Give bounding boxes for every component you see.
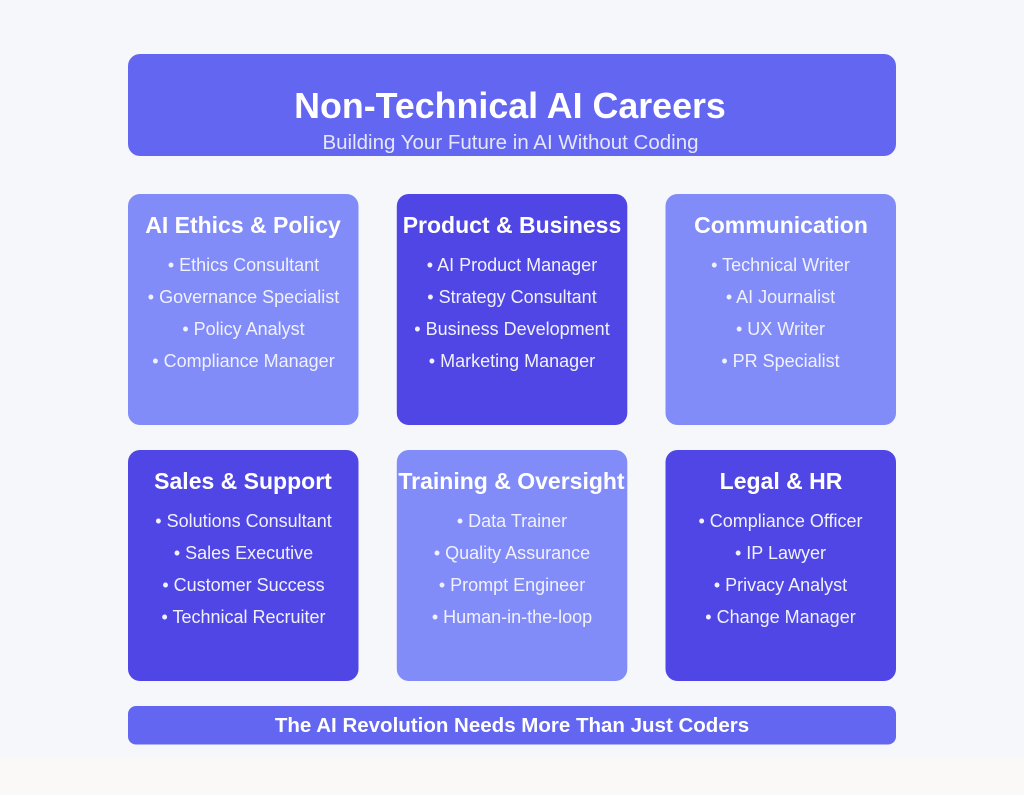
panel: AI Ethics & Policy: • Compliance Manager bbox=[152, 351, 335, 371]
panel: Product & Business: • Marketing Manager bbox=[429, 351, 595, 371]
panel: Sales & Support: • Customer Success bbox=[162, 575, 325, 595]
panel: Training & Oversight: • Prompt Engineer bbox=[439, 575, 585, 595]
panel: Sales & Support: • Sales Executive bbox=[174, 543, 313, 563]
panel: Sales & Support: • Technical Recruiter bbox=[161, 607, 326, 627]
header banner bbox=[128, 54, 896, 156]
panel: Legal & HR: • Privacy Analyst bbox=[714, 575, 847, 595]
panel: Product & Business: • Business Development bbox=[414, 319, 610, 339]
panel: AI Ethics & Policy: • Governance Specialist bbox=[148, 287, 339, 307]
panel: Communication: • Technical Writer bbox=[711, 255, 850, 275]
panel: Legal & HR bbox=[666, 450, 896, 681]
panel: Sales & Support bbox=[128, 450, 358, 681]
panel: Training & Oversight: • Human-in-the-loop bbox=[432, 607, 592, 627]
panel: Communication: Communication bbox=[694, 212, 868, 238]
panel: Communication bbox=[666, 194, 896, 425]
panel: Legal & HR: • Compliance Officer bbox=[698, 511, 863, 531]
panel: AI Ethics & Policy: AI Ethics & Policy bbox=[145, 212, 341, 238]
footer banner: The AI Revolution Needs More Than Just Coders bbox=[275, 714, 749, 737]
panel: Legal & HR: • Change Manager bbox=[705, 607, 856, 627]
panel: Sales & Support: Sales & Support bbox=[154, 468, 332, 494]
subtitle: Building Your Future in AI Without Coding bbox=[322, 131, 699, 154]
panel: Legal & HR: Legal & HR bbox=[720, 468, 843, 494]
panel: Training & Oversight: • Data Trainer bbox=[457, 511, 567, 531]
panel: Communication: • UX Writer bbox=[736, 319, 825, 339]
title: Non-Technical AI Careers bbox=[294, 86, 726, 126]
panel: AI Ethics & Policy bbox=[128, 194, 358, 425]
panel: Legal & HR: • IP Lawyer bbox=[735, 543, 826, 563]
panel: Training & Oversight: Training & Oversight bbox=[398, 468, 625, 494]
panel: Product & Business bbox=[397, 194, 627, 425]
panel: Communication: • AI Journalist bbox=[726, 287, 835, 307]
panel: Product & Business: • AI Product Manager bbox=[427, 255, 597, 275]
panel: Product & Business: • Strategy Consultant bbox=[427, 287, 597, 307]
panel: Sales & Support: • Solutions Consultant bbox=[155, 511, 332, 531]
panel: Product & Business: Product & Business bbox=[403, 212, 621, 238]
panel: AI Ethics & Policy: • Policy Analyst bbox=[182, 319, 305, 339]
panel: Communication: • PR Specialist bbox=[721, 351, 840, 371]
footer banner bbox=[128, 706, 896, 744]
panel: Training & Oversight: • Quality Assurance bbox=[434, 543, 590, 563]
panel: Training & Oversight bbox=[397, 450, 627, 681]
panel: AI Ethics & Policy: • Ethics Consultant bbox=[168, 255, 319, 275]
